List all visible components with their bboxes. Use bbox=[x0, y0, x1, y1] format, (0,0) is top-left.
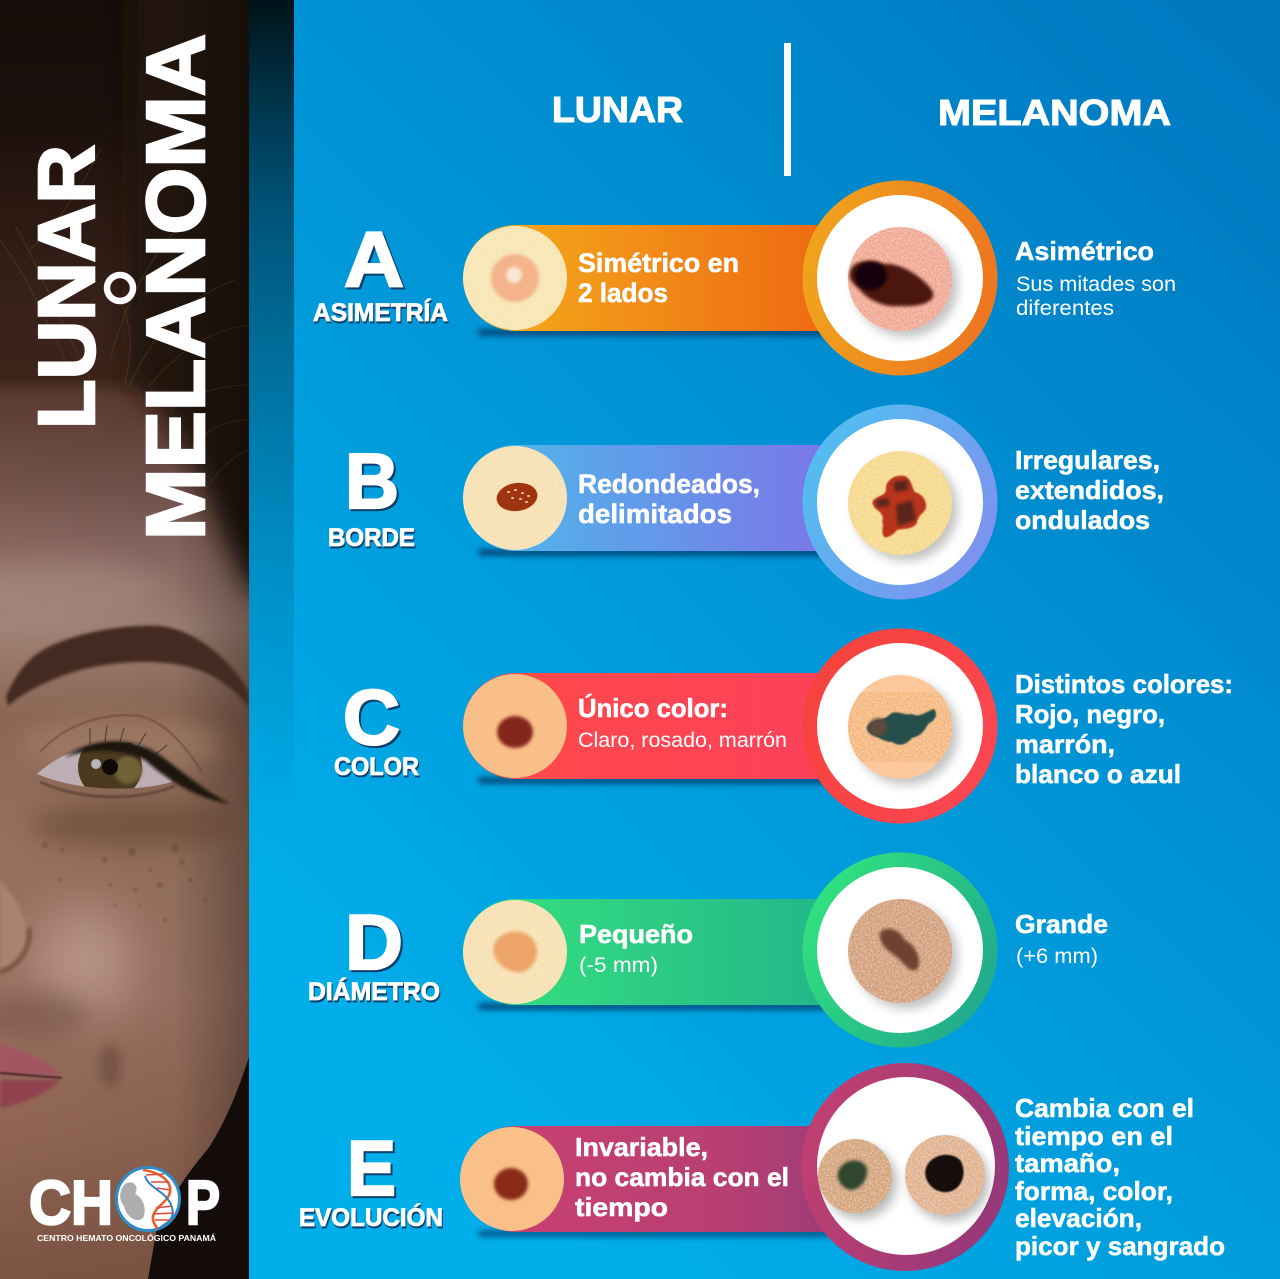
logo letter P: P bbox=[186, 1169, 220, 1238]
dark vertical strip bbox=[249, 0, 294, 840]
title word LUNAR: LUNAR bbox=[22, 145, 111, 429]
row B: borde bbox=[328, 404, 1164, 600]
row D: diámetro: (-5 mm) bbox=[579, 954, 658, 977]
melanoma text bbox=[1015, 236, 1176, 320]
title letter o bbox=[107, 275, 133, 301]
header divider bbox=[784, 43, 791, 176]
melanoma text: Irregulares, bbox=[1015, 445, 1160, 475]
hair mass right bbox=[120, 0, 249, 603]
jaw shadow bbox=[148, 1057, 249, 1279]
pill shadow bbox=[478, 1230, 830, 1237]
melanoma text: Sus mitades son bbox=[1016, 273, 1176, 296]
mole photo: round border bbox=[463, 446, 567, 550]
title: LUNAR o MELANOMA bbox=[22, 34, 222, 540]
melanoma text: Asimétrico bbox=[1015, 236, 1154, 266]
row C: color: Claro, rosado, marrón bbox=[578, 729, 787, 752]
pill shadow bbox=[478, 1003, 830, 1010]
letter E: E bbox=[347, 1124, 396, 1212]
melanoma text: tiempo en el bbox=[1015, 1121, 1173, 1151]
melanoma text: tamaño, bbox=[1015, 1148, 1120, 1178]
melanoma ring bbox=[802, 404, 998, 600]
melanoma text: picor y sangrado bbox=[1015, 1231, 1225, 1261]
row B: borde: delimitados bbox=[578, 499, 732, 529]
lower lid bbox=[40, 782, 175, 797]
melanoma text: diferentes bbox=[1016, 297, 1114, 320]
row E: evolución: tiempo bbox=[575, 1192, 668, 1222]
pill shadow bbox=[478, 329, 830, 336]
eye socket bbox=[28, 715, 222, 770]
melanoma ring bbox=[802, 180, 998, 376]
row E: evolución bbox=[299, 1063, 1225, 1271]
melanoma text: Rojo, negro, bbox=[1015, 699, 1165, 729]
label COLOR: COLOR bbox=[334, 753, 419, 781]
logo subtitle: CENTRO HEMATO ONCOLÓGICO PANAMÁ bbox=[37, 1232, 216, 1243]
pill bbox=[463, 1126, 903, 1232]
upper lip shadow bbox=[0, 993, 90, 1037]
eyelid crease bbox=[40, 715, 202, 772]
mole photo: single colour bbox=[463, 674, 567, 778]
melanoma text bbox=[1015, 445, 1164, 535]
pill shadow bbox=[478, 777, 830, 784]
eyebrow bbox=[6, 626, 249, 708]
pill text: Único color: bbox=[578, 693, 728, 723]
melanoma text: Grande bbox=[1015, 909, 1108, 939]
melanoma text: extendidos, bbox=[1015, 475, 1164, 505]
melanoma text: elevación, bbox=[1015, 1203, 1142, 1233]
melanoma text: Cambia con el bbox=[1015, 1093, 1194, 1123]
hair strands bbox=[0, 150, 249, 500]
mole photo: unchanged bbox=[460, 1127, 564, 1231]
cheek highlight bbox=[35, 905, 135, 1015]
dimple bbox=[99, 1044, 121, 1088]
pill text: Redondeados, bbox=[578, 469, 760, 499]
melanoma ring bbox=[802, 628, 998, 824]
panel: face photograph bbox=[0, 0, 249, 1279]
letter A: A bbox=[344, 215, 404, 303]
label BORDE: BORDE bbox=[328, 524, 415, 552]
row A: asimetría: 2 lados bbox=[578, 278, 668, 308]
nose bbox=[0, 880, 27, 968]
letter B: B bbox=[345, 437, 399, 525]
row A: asimetría bbox=[313, 180, 1176, 376]
pill bbox=[463, 899, 903, 1005]
row C: color bbox=[334, 628, 1233, 824]
melanoma ring bbox=[802, 852, 998, 1048]
letter D: D bbox=[345, 898, 403, 986]
logo: CHOP bbox=[29, 1168, 220, 1243]
melanoma text: marrón, bbox=[1015, 729, 1115, 759]
mole photo: small diameter bbox=[463, 900, 567, 1004]
label ASIMETRÍA: ASIMETRÍA bbox=[313, 298, 448, 327]
pill bbox=[463, 445, 903, 551]
forehead light bbox=[0, 561, 148, 608]
lower eye shadow bbox=[30, 803, 240, 847]
melanoma text: Distintos colores: bbox=[1015, 669, 1233, 699]
melanoma text bbox=[1015, 1093, 1225, 1261]
melanoma text bbox=[1015, 669, 1233, 789]
pill shadow bbox=[478, 549, 830, 556]
heading: LUNAR: LUNAR bbox=[552, 89, 683, 130]
melanoma text: forma, color, bbox=[1015, 1176, 1173, 1206]
lips bbox=[0, 1044, 62, 1076]
logo letters CH: CH bbox=[29, 1169, 113, 1238]
pill text: Invariable, bbox=[575, 1132, 708, 1162]
pill text: Pequeño bbox=[579, 919, 693, 949]
melanoma ring bbox=[801, 1063, 1009, 1271]
label EVOLUCIÓN: EVOLUCIÓN bbox=[299, 1202, 443, 1232]
label DIÁMETRO: DIÁMETRO bbox=[308, 977, 440, 1006]
pill bbox=[463, 225, 903, 331]
row D: diámetro bbox=[308, 852, 1108, 1048]
melanoma text bbox=[1015, 909, 1108, 968]
logo DNA circle bbox=[116, 1168, 180, 1230]
lashes bbox=[90, 725, 167, 755]
pill bbox=[463, 673, 903, 779]
freckles bbox=[42, 842, 207, 922]
melanoma text: ondulados bbox=[1015, 505, 1150, 535]
mole photo: benign asymmetry bbox=[463, 226, 567, 330]
title word MELANOMA: MELANOMA bbox=[129, 34, 222, 540]
heading: MELANOMA: MELANOMA bbox=[938, 92, 1171, 133]
melanoma text: blanco o azul bbox=[1015, 759, 1181, 789]
pill text: Simétrico en bbox=[578, 248, 739, 278]
letter C: C bbox=[343, 673, 400, 761]
row E: evolución: no cambia con el bbox=[575, 1162, 789, 1192]
melanoma text: (+6 mm) bbox=[1016, 945, 1098, 968]
upper lash line bbox=[65, 741, 230, 804]
eye bbox=[37, 742, 172, 789]
